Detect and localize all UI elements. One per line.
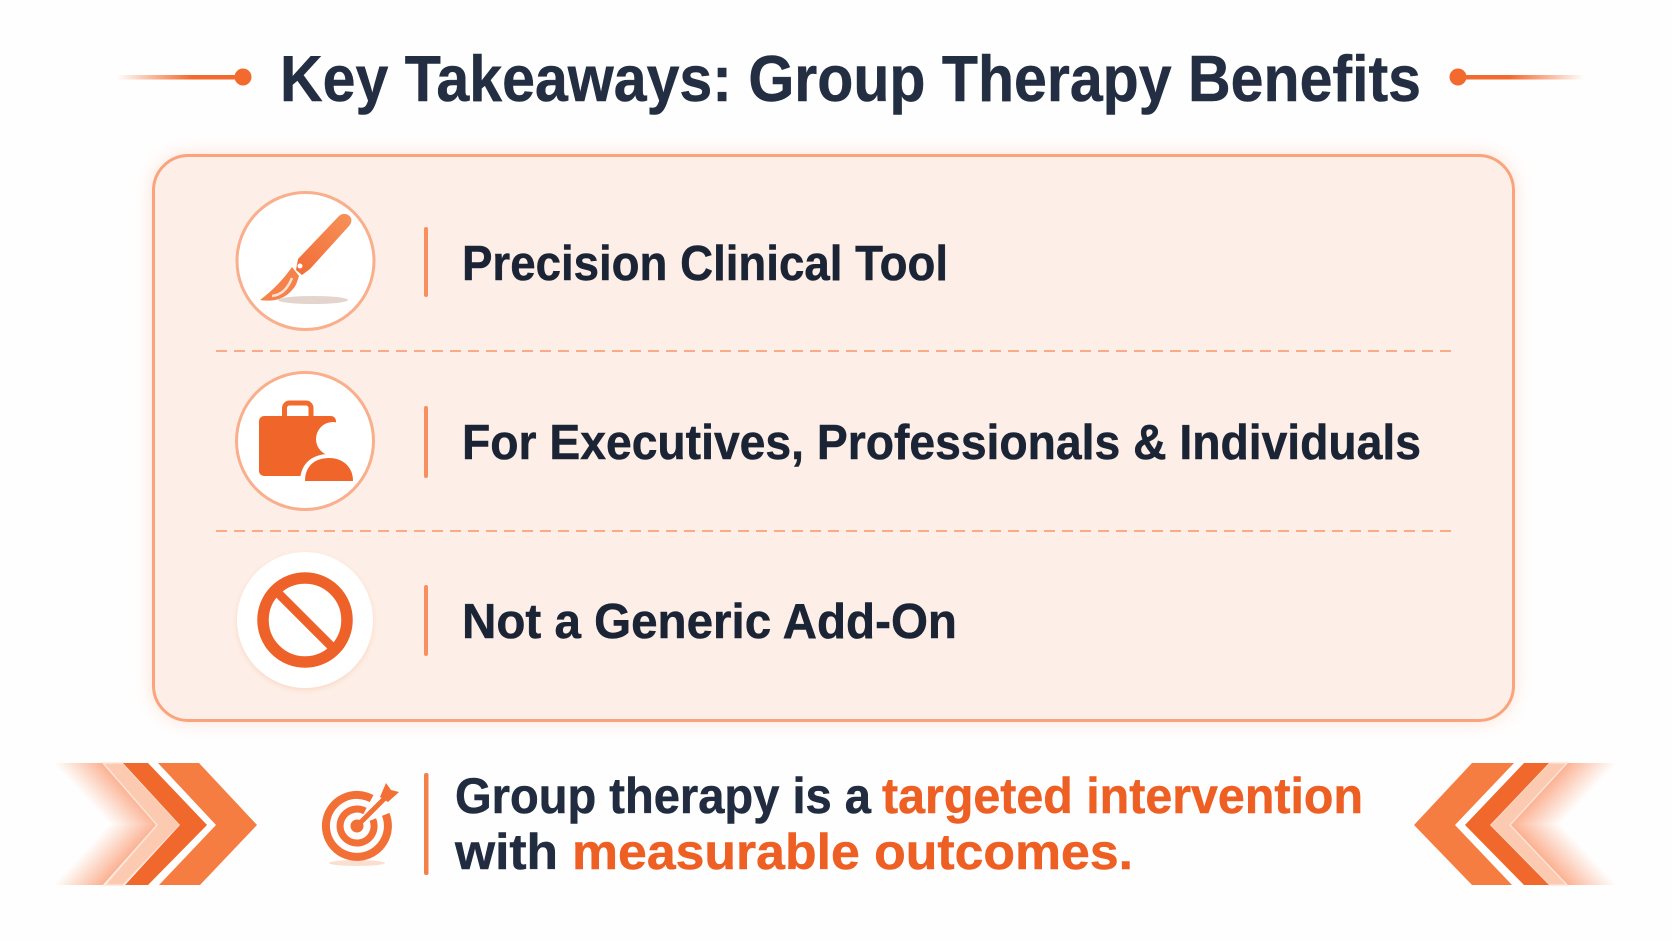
callout: conclusion bbox=[326, 768, 1363, 880]
callout text: Group therapy is a bbox=[455, 768, 872, 824]
title right accent bbox=[1450, 68, 1584, 86]
panel: takeaways card bbox=[153, 155, 1514, 721]
right chevrons bbox=[1414, 763, 1617, 885]
icon: scalpel bbox=[237, 192, 374, 330]
divider bar bbox=[424, 585, 428, 656]
callout text: with bbox=[454, 824, 558, 880]
callout text bbox=[454, 768, 1363, 880]
label: Precision Clinical Tool bbox=[462, 237, 948, 291]
label: Not a Generic Add-On bbox=[462, 595, 957, 649]
row: not a generic add-on bbox=[237, 552, 957, 690]
left chevrons bbox=[53, 763, 257, 885]
icon: briefcase and person bbox=[236, 372, 374, 510]
callout text: targeted intervention bbox=[882, 768, 1363, 824]
title text: Key Takeaways: Group Therapy Benefits bbox=[280, 42, 1421, 115]
divider bar bbox=[424, 406, 428, 478]
row: executives and professionals bbox=[236, 372, 1421, 510]
icon: target with arrow bbox=[326, 783, 399, 866]
title bbox=[117, 42, 1584, 115]
icon: prohibition sign bbox=[237, 552, 373, 690]
divider bar bbox=[424, 227, 428, 297]
row: precision clinical tool bbox=[237, 192, 948, 330]
divider bar bbox=[424, 773, 428, 875]
label: For Executives, Professionals & Individuals bbox=[462, 416, 1421, 470]
callout text: measurable outcomes. bbox=[572, 824, 1133, 880]
title left accent bbox=[117, 68, 252, 86]
